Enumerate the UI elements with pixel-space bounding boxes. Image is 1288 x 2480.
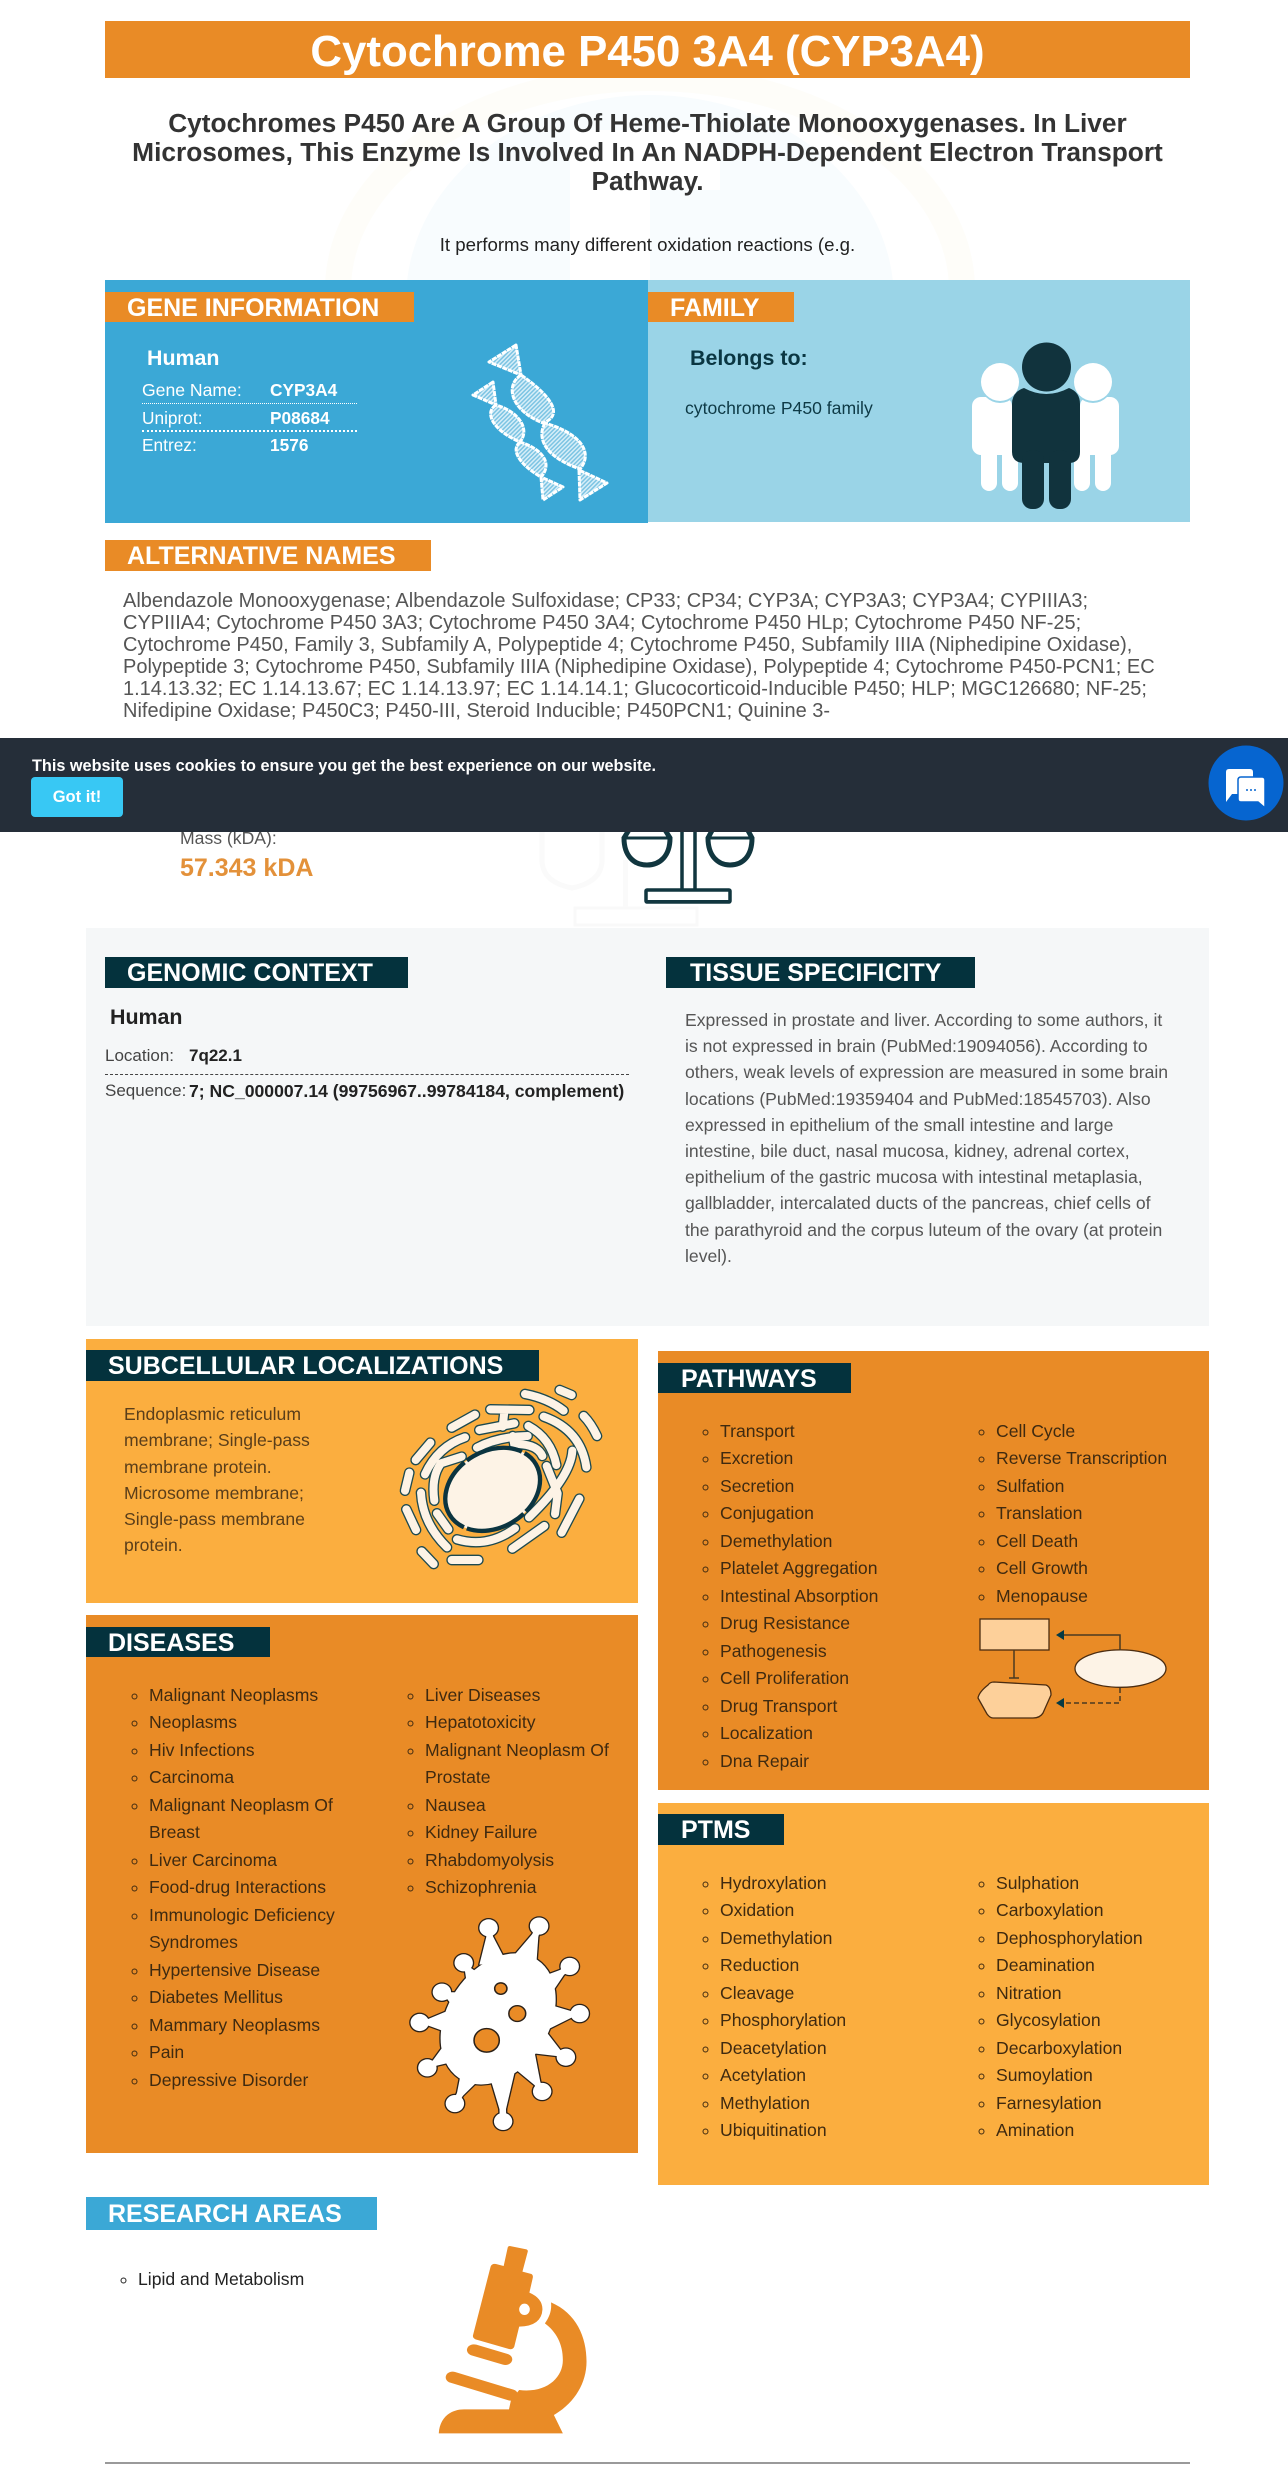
list: pathways column 2: Menopause: [996, 1586, 1088, 1606]
list: pathways column 1: Intestinal Absorption: [720, 1586, 878, 1606]
list: diseases column 1: Mammary Neoplasms: [149, 2015, 320, 2035]
faint background watermark: [0, 0, 1288, 1000]
list: diseases column 1: Immunologic Deficiency: [149, 1905, 335, 1925]
heading: alternative names: ALTERNATIVE NAMES: [127, 542, 396, 570]
icon: dna helix: [471, 344, 609, 502]
list: diseases column 1: Hiv Infections: [149, 1740, 255, 1760]
tissue specificity text: locations (PubMed:19359404 and PubMed:18545703). Also: [685, 1089, 1151, 1109]
list: diseases column 1: Syndromes: [149, 1932, 238, 1952]
genomic location: [105, 1046, 242, 1065]
tissue specificity text: expressed in epithelium of the small intestine and large: [685, 1115, 1113, 1135]
list: ptms column 1: Methylation: [720, 2093, 810, 2113]
entrez row: [142, 435, 308, 455]
list: diseases column 1: Pain: [149, 2042, 184, 2062]
list: ptms column 1: Phosphorylation: [720, 2010, 846, 2030]
uniprot row: [142, 408, 330, 428]
genomic location: 7q22.1: [189, 1046, 242, 1065]
list: diseases column 1: Depressive Disorder: [149, 2070, 308, 2090]
heading: pathways: [658, 1363, 851, 1393]
list: pathways column 1: Demethylation: [720, 1531, 832, 1551]
alternative names text: CYPIIIA4; Cytochrome P450 3A3; Cytochrome P450 3A4; Cytochrome P450 HLp; Cytochrome P450 NF-25;: [123, 612, 1081, 634]
list: ptms column 1: Hydroxylation: [720, 1873, 827, 1893]
list: ptms column 1: [702, 1873, 846, 2140]
icon: family of people: [972, 342, 1119, 509]
panel: subcellular localizations: [86, 1339, 638, 1603]
title banner: Cytochrome P450 3A4 (CYP3A4): [310, 27, 985, 76]
list: diseases column 2: Prostate: [425, 1767, 491, 1787]
list: pathways column 1: Dna Repair: [720, 1751, 809, 1771]
panel: pathways: [658, 1351, 1209, 1790]
entrez row: 1576: [270, 435, 308, 455]
list: ptms column 2: Carboxylation: [996, 1900, 1104, 1920]
uniprot row: Uniprot:: [142, 408, 203, 428]
heading: diseases: [86, 1627, 270, 1657]
list: ptms column 1: Demethylation: [720, 1928, 832, 1948]
localization text: [124, 1404, 310, 1555]
list: ptms column 2: Sumoylation: [996, 2065, 1093, 2085]
heading: gene information: GENE INFORMATION: [127, 294, 379, 322]
list: diseases column 1: [132, 1685, 335, 2090]
list: pathways column 2: Translation: [996, 1503, 1082, 1523]
list: diseases column 1: Hypertensive Disease: [149, 1960, 320, 1980]
list: ptms column 1: Reduction: [720, 1955, 799, 1975]
localization text: protein.: [124, 1535, 183, 1555]
alternative names text: Albendazole Monooxygenase; Albendazole Sulfoxidase; CP33; CP34; CYP3A; CYP3A3; CYP3A4; CYPIIIA3;: [123, 590, 1088, 612]
list: ptms column 1: Oxidation: [720, 1900, 794, 1920]
list: pathways column 1: Secretion: [720, 1476, 794, 1496]
genomic sequence: Sequence:: [105, 1081, 186, 1100]
subtitle: Cytochromes P450 Are A Group Of Heme-Thiolate Monooxygenases. In Liver: [168, 108, 1127, 138]
list: ptms column 2: Glycosylation: [996, 2010, 1101, 2030]
heading: ptms: PTMS: [681, 1816, 750, 1844]
icon: balance scale: [622, 832, 754, 904]
list: research areas: Lipid and Metabolism: [138, 2269, 304, 2289]
list: ptms column 1: Ubiquitination: [720, 2120, 827, 2140]
list: diseases column 2: Rhabdomyolysis: [425, 1850, 554, 1870]
tissue specificity text: the parathyroid and the corpus luteum of the ovary (at protein: [685, 1220, 1162, 1240]
list: diseases column 1: Liver Carcinoma: [149, 1850, 277, 1870]
gene name row: CYP3A4: [270, 380, 337, 400]
panel: gene information: [105, 280, 648, 523]
subtitle: Pathway.: [591, 166, 704, 196]
tissue specificity text: gallbladder, intercalated ducts of the pancreas, chief cells of: [685, 1193, 1151, 1213]
localization text: membrane; Single-pass: [124, 1430, 310, 1450]
list: diseases column 1: Diabetes Mellitus: [149, 1987, 283, 2007]
heading: subcellular localizations: SUBCELLULAR LOCALIZATIONS: [108, 1352, 503, 1380]
list: diseases column 2: [408, 1685, 609, 1897]
list: ptms column 2: Deamination: [996, 1955, 1095, 1975]
footer rule: [105, 2462, 1190, 2464]
list: diseases column 2: Hepatotoxicity: [425, 1712, 536, 1732]
list: pathways column 1: Excretion: [720, 1448, 793, 1468]
list: ptms column 2: [978, 1873, 1143, 2140]
list: pathways column 1: Drug Resistance: [720, 1613, 850, 1633]
tissue specificity text: [685, 1010, 1168, 1266]
list: diseases column 1: Malignant Neoplasm Of: [149, 1795, 333, 1815]
subtitle: [132, 108, 1163, 196]
alternative names text: Polypeptide 3; Cytochrome P450, Subfamily IIIA (Niphedipine Oxidase), Polypeptide 4; Cytochrome P450-PCN1; EC: [123, 656, 1155, 678]
heading: ptms: [658, 1814, 784, 1845]
heading: pathways: PATHWAYS: [681, 1365, 817, 1393]
heading: family: [648, 292, 794, 322]
mass label: Mass (kDA):: [180, 828, 277, 848]
heading: diseases: DISEASES: [108, 1629, 234, 1657]
list: diseases column 1: Neoplasms: [149, 1712, 237, 1732]
tissue specificity text: intestine, bile duct, nasal mucosa, kidney, adrenal cortex,: [685, 1141, 1130, 1161]
alternative names text: [123, 590, 1155, 722]
localization text: Endoplasmic reticulum: [124, 1404, 301, 1424]
list: pathways column 1: Localization: [720, 1723, 813, 1743]
list: pathways column 1: [702, 1421, 878, 1771]
cookie consent bar: [0, 738, 1288, 832]
icon: endoplasmic reticulum: [400, 1384, 602, 1570]
family name: cytochrome P450 family: [685, 398, 873, 418]
genomic location: Location:: [105, 1046, 174, 1065]
list: pathways column 1: Platelet Aggregation: [720, 1558, 877, 1578]
list: ptms column 1: Cleavage: [720, 1983, 794, 2003]
list: ptms column 1: Acetylation: [720, 2065, 806, 2085]
icon: microscope: [438, 2246, 587, 2434]
list: diseases column 1: Breast: [149, 1822, 200, 1842]
list: pathways column 2: Cell Cycle: [996, 1421, 1075, 1441]
list: pathways column 1: Conjugation: [720, 1503, 814, 1523]
localization text: Single-pass membrane: [124, 1509, 305, 1529]
panel: genomic context and tissue specificity: [86, 928, 1209, 1326]
panel: ptms: [658, 1803, 1209, 2185]
list: ptms column 2: Decarboxylation: [996, 2038, 1122, 2058]
list: ptms column 2: Farnesylation: [996, 2093, 1102, 2113]
list: pathways column 2: Sulfation: [996, 1476, 1064, 1496]
title banner: [105, 21, 1190, 78]
list: pathways column 1: Transport: [720, 1421, 795, 1441]
heading: tissue specificity: TISSUE SPECIFICITY: [690, 959, 941, 987]
list: ptms column 1: Deacetylation: [720, 2038, 827, 2058]
tissue specificity text: level).: [685, 1246, 732, 1266]
list: pathways column 2: [978, 1421, 1167, 1606]
list: pathways column 1: Cell Proliferation: [720, 1668, 849, 1688]
cookie message: This website uses cookies to ensure you get the best experience on our website.: [32, 757, 656, 775]
list: diseases column 2: Schizophrenia: [425, 1877, 536, 1897]
list: diseases column 2: Kidney Failure: [425, 1822, 537, 1842]
localization text: Microsome membrane;: [124, 1483, 304, 1503]
got it button: [31, 777, 123, 817]
list: ptms column 2: Amination: [996, 2120, 1074, 2140]
icon: chat button: [1208, 746, 1284, 820]
list: diseases column 2: Malignant Neoplasm Of: [425, 1740, 609, 1760]
got it button: Got it!: [53, 788, 101, 806]
genomic species label: Human: [110, 1005, 182, 1029]
tissue specificity text: Expressed in prostate and liver. According to some authors, it: [685, 1010, 1162, 1030]
heading: genomic context: GENOMIC CONTEXT: [127, 959, 373, 987]
icon: virus: [409, 1916, 590, 2132]
list: pathways column 2: Cell Death: [996, 1531, 1078, 1551]
gene name row: [142, 380, 338, 400]
list: ptms column 2: Dephosphorylation: [996, 1928, 1143, 1948]
localization text: membrane protein.: [124, 1457, 272, 1477]
genomic sequence: 7; NC_000007.14 (99756967..99784184, complement): [189, 1081, 624, 1101]
list: ptms column 2: Sulphation: [996, 1873, 1079, 1893]
list: pathways column 1: Pathogenesis: [720, 1641, 827, 1661]
panel: family: [648, 280, 1190, 522]
alternative names text: 1.14.13.32; EC 1.14.13.67; EC 1.14.13.97; EC 1.14.14.1; Glucocorticoid-Inducible P450; HLP; MGC126680; NF-25;: [123, 678, 1147, 700]
list: pathways column 2: Reverse Transcription: [996, 1448, 1167, 1468]
list: diseases column 2: Nausea: [425, 1795, 486, 1815]
list: diseases column 2: Liver Diseases: [425, 1685, 540, 1705]
list: diseases column 1: Carcinoma: [149, 1767, 234, 1787]
belongs to label: Belongs to:: [690, 346, 808, 370]
icon: pathway diagram: [977, 1618, 1167, 1719]
intro sentence: It performs many different oxidation reactions (e.g.: [440, 234, 855, 255]
mass value: 57.343 kDA: [180, 854, 313, 882]
panel: diseases: [86, 1615, 638, 2153]
tissue specificity text: epithelium of the gastric mucosa with intestinal metaplasia,: [685, 1167, 1143, 1187]
tissue specificity text: others, weak levels of expression are measured in some brain: [685, 1062, 1168, 1082]
subtitle: Microsomes, This Enzyme Is Involved In An NADPH-Dependent Electron Transport: [132, 137, 1163, 167]
alternative names text: Cytochrome P450, Family 3, Subfamily A, Polypeptide 4; Cytochrome P450, Subfamily IIIA (Niphedipine Oxidase),: [123, 634, 1132, 656]
heading: research areas: RESEARCH AREAS: [108, 2200, 342, 2228]
gene name row: Gene Name:: [142, 380, 242, 400]
list: pathways column 1: Drug Transport: [720, 1696, 837, 1716]
heading: family: FAMILY: [670, 294, 759, 322]
list: ptms column 2: Nitration: [996, 1983, 1062, 2003]
species label: Human: [147, 346, 220, 370]
list: pathways column 2: Cell Growth: [996, 1558, 1088, 1578]
alternative names text: Nifedipine Oxidase; P450C3; P450-III, Steroid Inducible; P450PCN1; Quinine 3-: [123, 700, 830, 722]
entrez row: Entrez:: [142, 435, 197, 455]
list: diseases column 1: Malignant Neoplasms: [149, 1685, 318, 1705]
heading: research areas: [86, 2197, 377, 2230]
uniprot row: P08684: [270, 408, 330, 428]
list: diseases column 1: Food-drug Interactions: [149, 1877, 326, 1897]
tissue specificity text: is not expressed in brain (PubMed:19094056). According to: [685, 1036, 1148, 1056]
